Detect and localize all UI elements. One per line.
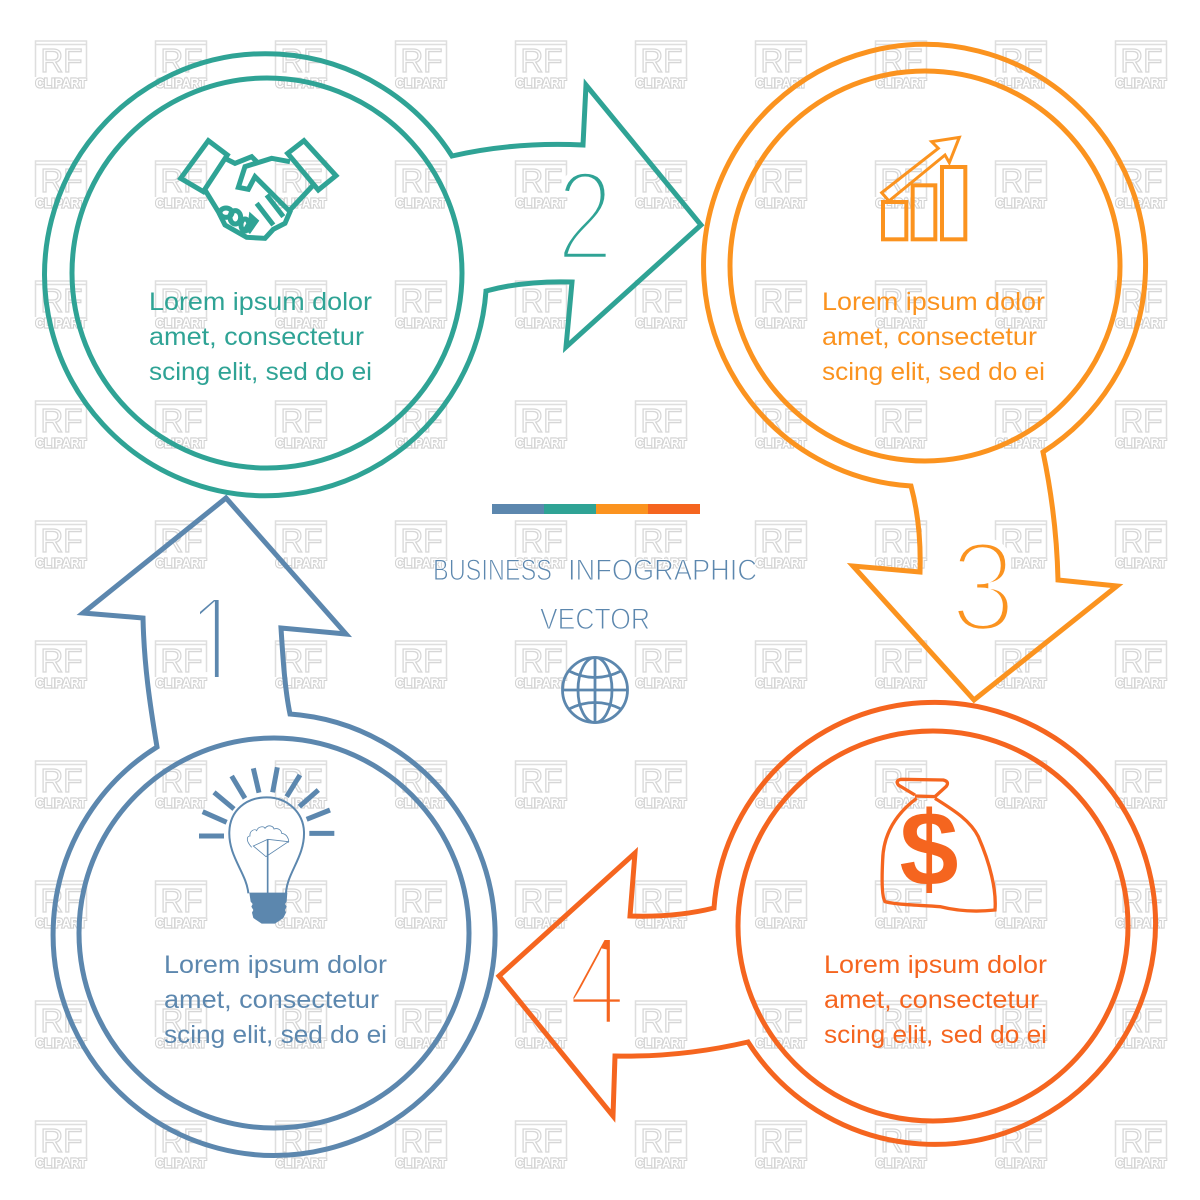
red outer ring with arrow 4	[499, 702, 1155, 1144]
text block: scing elit, sed do ei	[164, 1021, 387, 1049]
heading: BUSINESS	[433, 554, 552, 587]
text block: Lorem ipsum dolor	[822, 288, 1045, 316]
text block	[822, 288, 1045, 386]
number 4: 4	[569, 909, 625, 1053]
blue inner ring	[79, 738, 469, 1128]
text block: amet, consectetur	[149, 323, 364, 351]
icon: light bulb	[199, 767, 334, 924]
text block: Lorem ipsum dolor	[149, 288, 372, 316]
text block: scing elit, sed do ei	[149, 358, 372, 386]
text block	[149, 288, 372, 386]
colour bar	[492, 504, 700, 514]
text block: amet, consectetur	[824, 986, 1039, 1014]
panel: step 3 orange	[704, 44, 1146, 700]
teal outer ring with arrow 2	[45, 54, 701, 496]
text block: scing elit, sed do ei	[824, 1021, 1047, 1049]
panel: step 2 teal	[45, 54, 701, 496]
text block	[824, 951, 1047, 1049]
icon: handshake	[181, 141, 336, 238]
icon: bar chart with arrow	[882, 137, 965, 239]
panel: step 1 blue	[53, 498, 495, 1155]
text block: amet, consectetur	[822, 323, 1037, 351]
text block: amet, consectetur	[164, 986, 379, 1014]
icon: money bag	[882, 779, 995, 911]
teal inner ring	[72, 78, 462, 468]
heading	[433, 554, 757, 587]
orange outer ring with arrow 3	[704, 44, 1146, 700]
number 2: 2	[557, 144, 613, 288]
blue outer ring with arrow 1	[53, 498, 495, 1155]
heading: INFOGRAPHIC	[568, 554, 757, 587]
text block	[164, 951, 387, 1049]
subheading: VECTOR	[540, 603, 650, 636]
panel: centre title	[433, 504, 757, 722]
icon: globe	[562, 658, 628, 722]
text block: scing elit, sed do ei	[822, 358, 1045, 386]
text block: Lorem ipsum dolor	[164, 951, 387, 979]
panel: step 4 red	[499, 702, 1155, 1144]
number 1: 1	[187, 569, 243, 713]
red inner ring	[738, 731, 1128, 1121]
orange inner ring	[730, 71, 1120, 461]
number 3: 3	[950, 517, 1016, 659]
icon: dollar sign: $	[900, 790, 958, 908]
text block: Lorem ipsum dolor	[824, 951, 1047, 979]
